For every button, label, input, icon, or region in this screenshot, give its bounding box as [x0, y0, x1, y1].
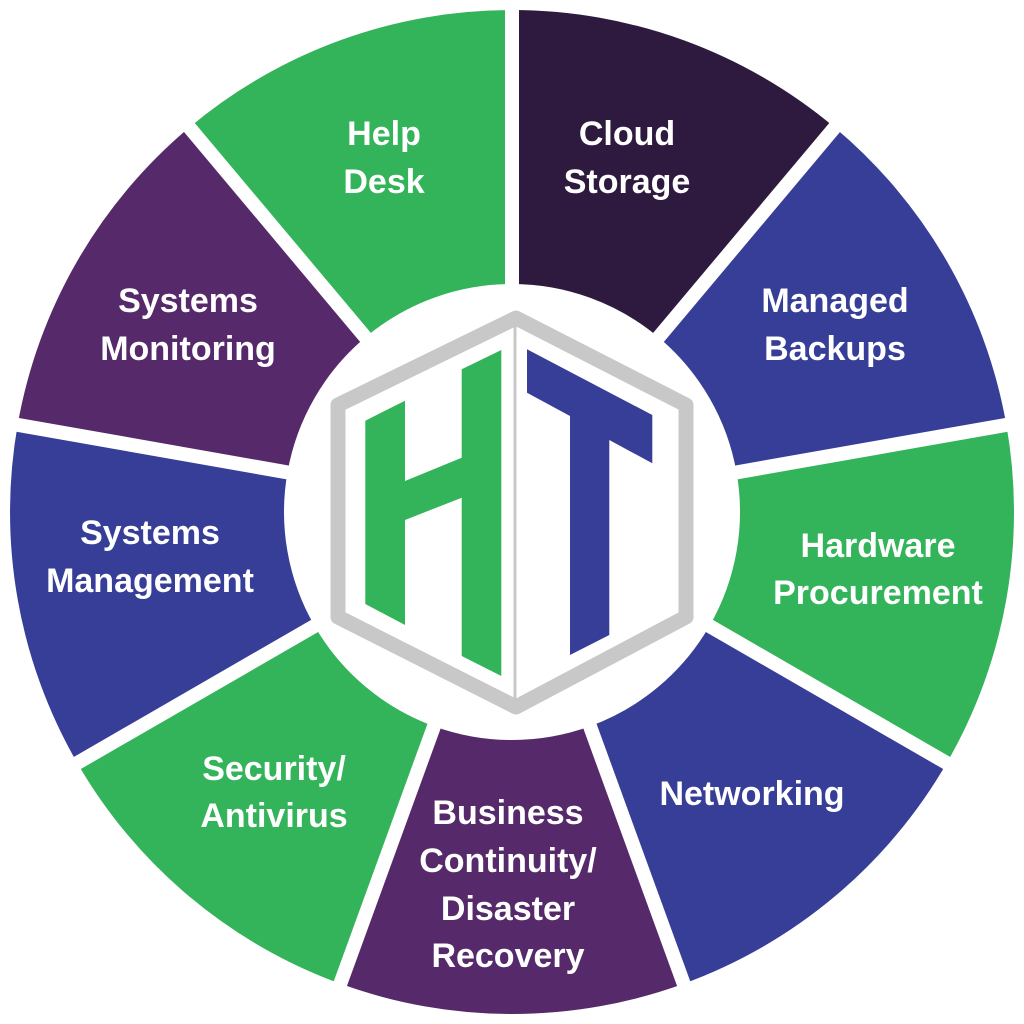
segment: business continuity [268, 676, 684, 1024]
label: systems management: Management [46, 562, 254, 600]
label: cloud storage: Storage [564, 163, 690, 201]
label: help desk: Help [347, 115, 421, 153]
segment: help desk [189, 0, 647, 378]
label: business continuity: Continuity/ [419, 842, 597, 880]
label: cloud storage: Cloud [579, 115, 675, 153]
label: business continuity: Recovery [431, 937, 585, 975]
segment: networking [502, 599, 947, 1024]
label: systems monitoring: Systems [118, 282, 258, 320]
segment: cloud storage [512, 10, 835, 337]
label: systems management: Systems [80, 514, 220, 552]
segment: security [37, 566, 452, 984]
segment: systems monitoring [18, 107, 396, 482]
label: networking: Networking [659, 775, 845, 813]
label: managed backups: Managed [761, 282, 909, 320]
logo [338, 318, 686, 707]
label: help desk: Desk [343, 163, 425, 201]
label: hardware procurement: Procurement [773, 574, 983, 612]
segment: hardware procurement [684, 425, 1024, 799]
label: systems monitoring: Monitoring [100, 330, 276, 368]
label: managed backups: Backups [764, 330, 906, 368]
segment: managed backups [624, 127, 1024, 586]
label: business continuity: Business [432, 794, 584, 832]
label: security antivirus: Security/ [202, 750, 346, 788]
label: business continuity: Disaster [441, 890, 575, 928]
label: security antivirus: Antivirus [200, 797, 348, 835]
segment: systems management [0, 320, 361, 763]
label: hardware procurement: Hardware [801, 527, 955, 565]
